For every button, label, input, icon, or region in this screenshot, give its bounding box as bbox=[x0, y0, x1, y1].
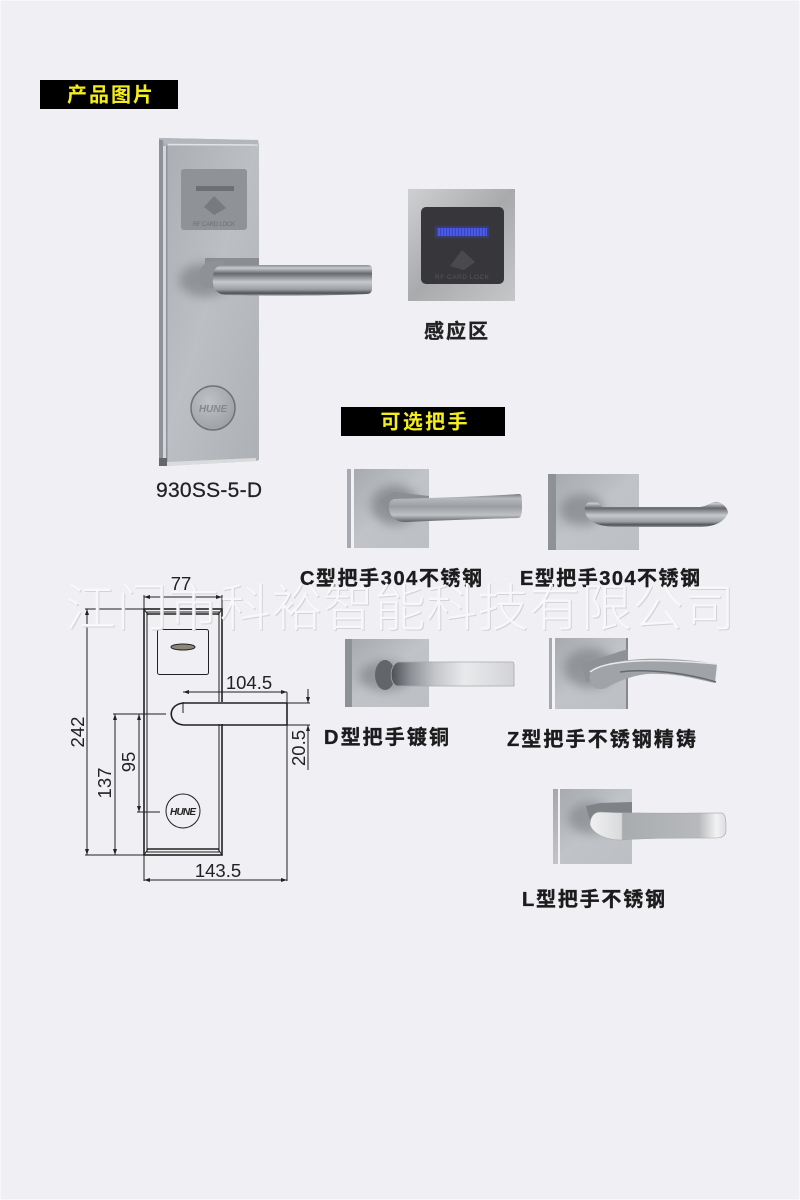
dimension labels: 143.5 bbox=[195, 860, 241, 881]
label D: D型把手镀铜 bbox=[324, 726, 449, 749]
label C: C型把手304不锈钢 bbox=[300, 567, 482, 590]
handle E bbox=[548, 474, 728, 550]
dimension labels: 20.5 bbox=[288, 730, 309, 766]
technical drawing bbox=[67, 573, 310, 882]
handle D bbox=[345, 639, 514, 707]
dimension lines bbox=[85, 595, 310, 881]
dimension labels bbox=[67, 573, 309, 881]
sensor label: 感应区 bbox=[424, 319, 488, 343]
label L: L型把手不锈钢 bbox=[522, 888, 665, 911]
drawing: sensor bbox=[158, 630, 208, 674]
heading: optional handles: 可选把手 bbox=[380, 410, 468, 434]
dimension arrows bbox=[85, 595, 310, 882]
dimension labels: 137 bbox=[94, 768, 115, 798]
sensor window: RF CARD LOCK bbox=[193, 222, 235, 228]
dimension labels: 242 bbox=[67, 717, 88, 747]
drawing: plate outline bbox=[144, 609, 222, 855]
key cover bbox=[191, 386, 235, 430]
drawing: key cover bbox=[166, 794, 200, 828]
model label: 930SS-5-D bbox=[156, 479, 262, 502]
watermark: 江门市科裕智能科技有限公司 bbox=[65, 567, 735, 641]
key cover: HUNE bbox=[199, 404, 227, 415]
sensor close-up: RF CARD LOCK bbox=[435, 274, 490, 281]
handle bbox=[179, 258, 372, 297]
dimension labels: 95 bbox=[118, 752, 139, 772]
heading: product images bbox=[40, 80, 178, 109]
heading: optional handles bbox=[341, 407, 505, 436]
dimension labels: 77 bbox=[171, 573, 191, 594]
dimension labels: 104.5 bbox=[226, 672, 272, 693]
drawing: handle bbox=[171, 702, 287, 725]
label E: E型把手304不锈钢 bbox=[520, 567, 700, 590]
label Z: Z型把手不锈钢精铸 bbox=[507, 728, 696, 751]
blue indicator bbox=[435, 226, 489, 238]
heading: product images: 产品图片 bbox=[67, 84, 153, 106]
sensor window bbox=[181, 169, 247, 230]
watermark: 江门市科裕智能科技有限公司 bbox=[66, 568, 736, 642]
handle Z bbox=[549, 638, 717, 709]
handle C bbox=[347, 469, 522, 548]
product image: main lock bbox=[159, 138, 372, 466]
handle L bbox=[553, 789, 726, 864]
sensor close-up bbox=[408, 189, 515, 301]
lock plate bbox=[159, 138, 259, 466]
drawing: key cover: HUNE bbox=[170, 807, 196, 818]
